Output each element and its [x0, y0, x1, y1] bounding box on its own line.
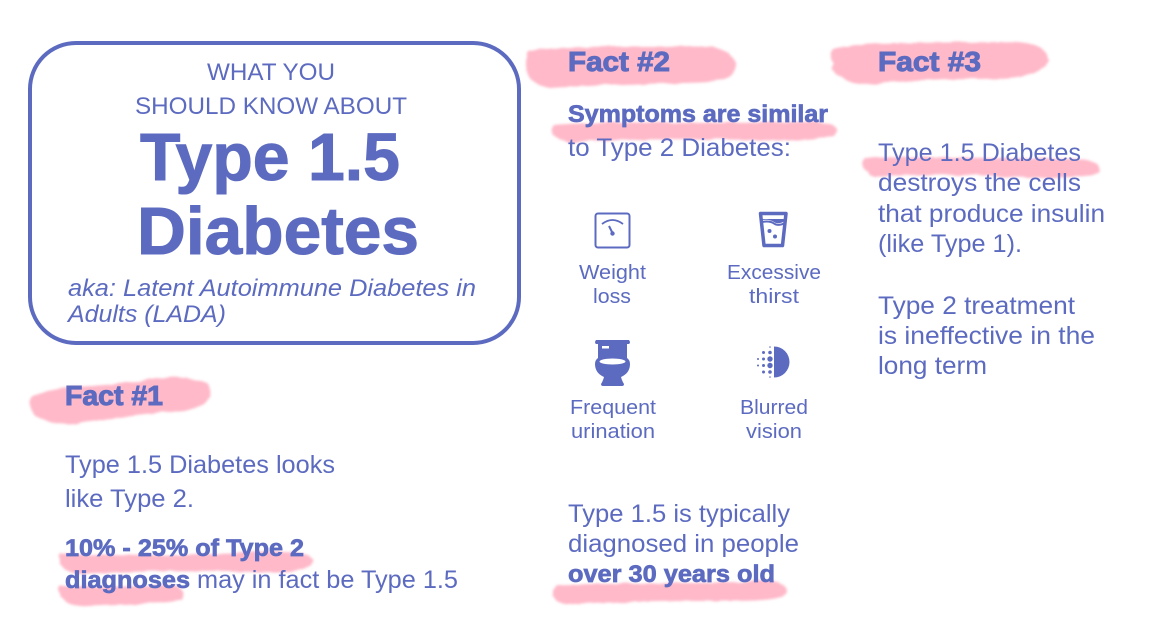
symptoms intro: to Type 2 Diabetes:: [568, 134, 791, 162]
symptom: frequent urination: Frequent: [570, 396, 656, 419]
title kicker: [135, 59, 407, 120]
fact 1 statistic: diagnoses: [65, 567, 190, 594]
main title: Diabetes: [137, 194, 419, 269]
subtitle: aka: Latent Autoimmune Diabetes in: [68, 275, 476, 302]
fact 1 heading: Fact #1: [65, 380, 163, 411]
symptom: excessive thirst: Excessive: [727, 261, 821, 284]
fact 1 statistic: may in fact be Type 1.5: [197, 566, 458, 594]
main title: [137, 120, 419, 269]
age at diagnosis text: Type 1.5 is typically: [568, 500, 791, 528]
symptom: weight loss: [579, 214, 646, 308]
fact 3 text: [862, 139, 1105, 380]
symptom: weight loss: Weight: [579, 261, 646, 284]
subtitle: Adults (LADA): [66, 301, 226, 328]
symptom: blurred vision: vision: [746, 420, 802, 443]
fact 3 text: (like Type 1).: [878, 230, 1022, 258]
panel: fact 1: [30, 378, 458, 606]
fact 1 heading: [30, 378, 210, 424]
fact 2 heading: [526, 46, 736, 88]
fact 1 statistic: 10% - 25% of Type 2: [65, 535, 304, 562]
title kicker: SHOULD KNOW ABOUT: [135, 93, 407, 120]
fact 1 text: like Type 2.: [65, 485, 194, 513]
icon: glass of water: [760, 214, 786, 246]
fact 1 text: Type 1.5 Diabetes looks: [65, 451, 335, 479]
icon: weighing scale: [596, 214, 630, 248]
main title: Type 1.5: [140, 120, 400, 195]
title panel: [30, 43, 519, 343]
title kicker: WHAT YOU: [207, 59, 335, 86]
age at diagnosis text: diagnosed in people: [568, 530, 799, 558]
symptoms intro: Symptoms are similar: [568, 101, 828, 128]
symptom: frequent urination: urination: [571, 420, 655, 443]
symptom: excessive thirst: thirst: [749, 285, 799, 308]
fact 3 heading: Fact #3: [878, 46, 981, 77]
icon: half circle with dots: [757, 346, 790, 378]
fact 2 heading: Fact #2: [568, 46, 670, 77]
fact 3 text: Type 1.5 Diabetes: [878, 139, 1081, 167]
age at diagnosis text: over 30 years old: [568, 561, 775, 588]
symptom: excessive thirst: [727, 214, 821, 308]
symptom: blurred vision: [740, 346, 808, 443]
icon: toilet: [595, 340, 630, 386]
age at diagnosis text: [553, 500, 799, 605]
panel: fact 3: [831, 42, 1105, 380]
fact 3 text: is ineffective in the: [878, 322, 1095, 350]
subtitle: [66, 275, 476, 328]
fact 3 text: long term: [878, 352, 987, 380]
fact 1 statistic: [59, 535, 458, 606]
symptom: blurred vision: Blurred: [740, 396, 808, 419]
fact 3 text: destroys the cells: [878, 169, 1081, 197]
symptom: weight loss: loss: [593, 285, 631, 308]
panel: fact 2: [526, 46, 837, 605]
symptoms intro: [552, 101, 837, 162]
fact 3 text: that produce insulin: [878, 200, 1105, 228]
fact 3 heading: [831, 42, 1048, 84]
fact 1 text: [65, 451, 335, 513]
symptom: frequent urination: [570, 340, 656, 443]
fact 3 text: Type 2 treatment: [878, 292, 1075, 320]
